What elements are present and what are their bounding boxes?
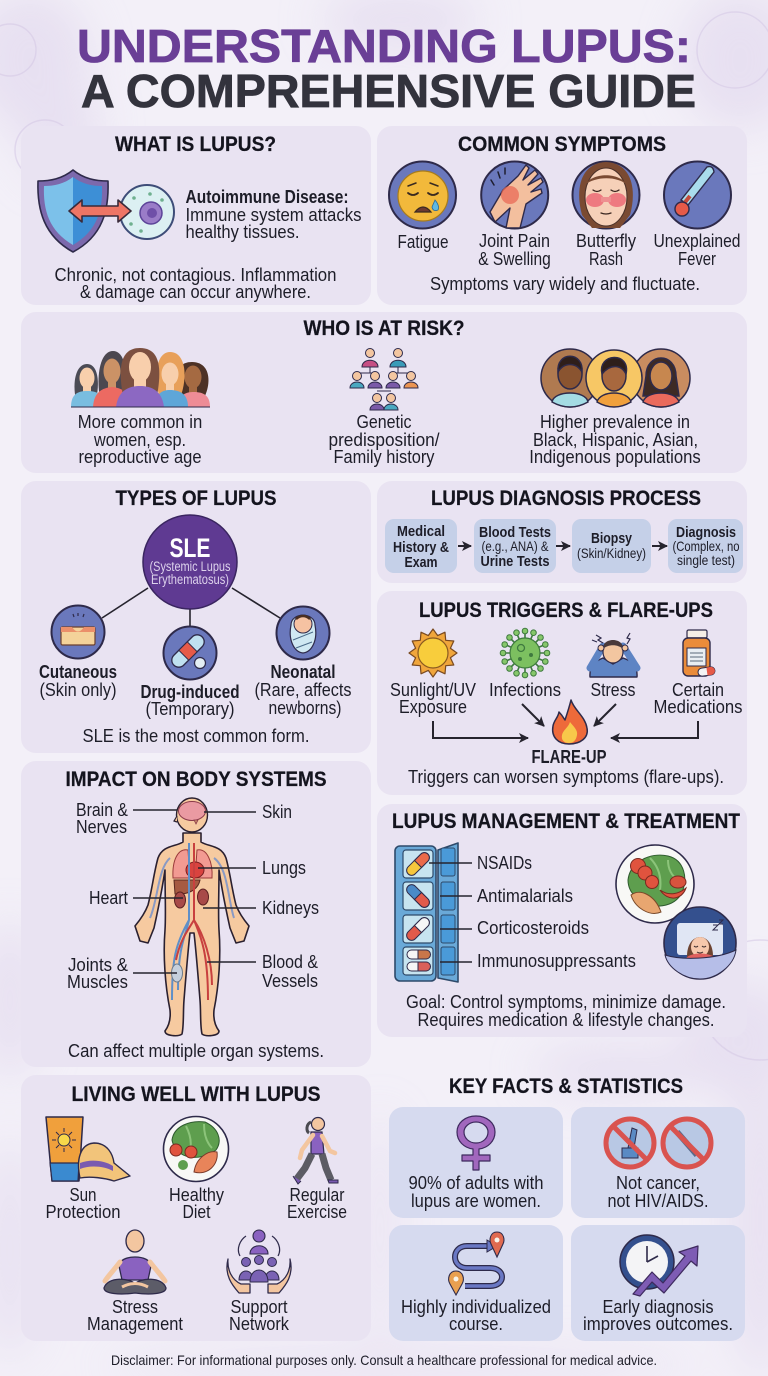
labels: risk groups: Black, Hispanic, Asian,	[533, 429, 698, 450]
heading: living well: LIVING WELL WITH LUPUS	[72, 1082, 320, 1106]
card: early diagnosis	[571, 1225, 745, 1341]
heading: diagnosis: LUPUS DIAGNOSIS PROCESS	[431, 486, 701, 510]
icon: cutaneous	[52, 606, 104, 658]
arrow	[458, 545, 471, 547]
labels: risk groups	[78, 411, 701, 467]
labels: medications: NSAIDs	[477, 852, 532, 873]
labels: symptoms	[398, 230, 740, 269]
labels: risk groups: Higher prevalence in	[540, 411, 690, 432]
diagram node: SLE: (Systemic Lupus	[150, 559, 231, 574]
label: flare-up: FLARE-UP	[532, 746, 606, 767]
card: women statistic: lupus are women.	[411, 1190, 541, 1211]
icon: crossed-out symbols	[606, 1119, 711, 1167]
labels: risk groups: Genetic	[356, 411, 412, 432]
icon: flame	[553, 700, 587, 744]
labels: types: newborns)	[268, 697, 342, 718]
text: triggers note: Triggers can worsen symptoms (flare-ups).	[408, 766, 724, 787]
labels: triggers	[390, 679, 742, 717]
step: medical history	[385, 519, 457, 573]
labels: risk groups: Family history	[334, 446, 435, 467]
labels: types: (Rare, affects	[254, 679, 352, 700]
heading: impact: IMPACT ON BODY SYSTEMS	[66, 767, 326, 791]
card: not cancer	[571, 1107, 745, 1218]
panel: living well	[21, 1075, 371, 1341]
labels: living well: Protection	[46, 1201, 120, 1222]
text: treatment goal: Goal: Control symptoms, minimize damage.	[406, 991, 726, 1012]
step: biopsy: Biopsy	[591, 530, 633, 547]
labels: medications: Immunosuppressants	[477, 950, 636, 971]
labels: living well: Sun	[70, 1184, 96, 1205]
panel: common symptoms	[377, 126, 747, 305]
labels: triggers: Exposure	[399, 696, 467, 717]
card: individualized course	[389, 1225, 563, 1341]
leader lines	[429, 863, 472, 962]
labels: living well: Exercise	[287, 1201, 347, 1222]
labels: symptoms: Fever	[678, 248, 716, 269]
step: blood tests: (e.g., ANA) &	[482, 538, 549, 554]
labels: triggers: Certain	[672, 679, 724, 700]
panel: triggers and flare-ups	[377, 591, 747, 795]
labels: body systems: Blood &	[262, 951, 319, 972]
labels: body systems: Muscles	[67, 971, 128, 992]
icon: sun protection	[46, 1117, 130, 1181]
icon: joint pain	[481, 162, 548, 228]
icon: butterfly rash	[572, 162, 640, 228]
labels: risk groups: women, esp.	[93, 429, 186, 450]
labels: living well: Support	[230, 1296, 288, 1317]
labels: living well: Stress	[112, 1296, 158, 1317]
icon: medication bottle	[683, 630, 715, 677]
panel: what is lupus	[21, 126, 371, 305]
labels: body systems	[67, 799, 319, 992]
labels: triggers: Medications	[654, 696, 742, 717]
labels: types: Drug-induced	[140, 681, 240, 702]
labels: body systems: Kidneys	[262, 897, 319, 918]
step: diagnosis: (Complex, no	[672, 538, 740, 554]
card: women statistic: 90% of adults with	[408, 1172, 544, 1193]
labels: symptoms: Butterfly	[576, 230, 637, 251]
labels: risk groups: More common in	[78, 411, 202, 432]
panel: impact on body systems	[21, 761, 371, 1067]
text: autoimmune disease	[186, 186, 362, 242]
labels: medications: Corticosteroids	[477, 917, 589, 938]
title: A COMPREHENSIVE GUIDE	[81, 65, 696, 117]
diagram node: SLE: Erythematosus)	[151, 572, 229, 587]
icon: stress management	[104, 1230, 166, 1294]
labels: types: (Skin only)	[40, 679, 116, 700]
icon: winding route	[449, 1232, 504, 1295]
icon: fatigue	[389, 162, 456, 228]
step: diagnosis: single test)	[677, 552, 735, 568]
title: UNDERSTANDING LUPUS:	[77, 20, 691, 72]
labels: living well: Network	[229, 1313, 290, 1334]
step: blood tests	[474, 519, 556, 573]
card: not cancer: not HIV/AIDS.	[608, 1190, 708, 1211]
labels: symptoms: Fatigue	[398, 231, 448, 252]
card: women statistic	[389, 1107, 563, 1218]
labels: living well: Healthy	[169, 1184, 225, 1205]
text: SLE note: SLE is the most common form.	[82, 725, 310, 746]
connector lines	[102, 588, 280, 628]
text: chronic note: Chronic, not contagious. Inflammation	[54, 264, 336, 285]
heading: key facts: KEY FACTS & STATISTICS	[449, 1074, 683, 1098]
card: individualized course: course.	[449, 1313, 503, 1334]
step: medical history: Medical	[397, 523, 445, 540]
labels: types: Neonatal	[270, 661, 336, 682]
labels: types	[39, 661, 352, 719]
card: not cancer: Not cancer,	[616, 1172, 700, 1193]
text: symptoms note: Symptoms vary widely and fluctuate.	[430, 273, 700, 294]
leader lines	[133, 810, 256, 973]
panel: management and treatment	[377, 804, 747, 1037]
diagram: human body	[135, 798, 249, 1036]
labels: body systems: Skin	[262, 801, 292, 822]
labels: body systems: Heart	[89, 887, 128, 908]
icon: sun	[409, 629, 457, 677]
heading: common symptoms: COMMON SYMPTOMS	[458, 132, 666, 156]
icon: diverse faces	[541, 349, 690, 407]
labels: types: (Temporary)	[146, 698, 234, 719]
icon: neonatal	[276, 606, 330, 660]
section: key facts and statistics	[389, 1074, 745, 1341]
arrow	[652, 545, 667, 547]
title	[77, 20, 696, 117]
icon: shield and immune cell	[38, 170, 174, 252]
heading: types of lupus: TYPES OF LUPUS	[116, 486, 276, 510]
text: impact note: Can affect multiple organ systems.	[68, 1040, 324, 1061]
icon: healthy diet	[164, 1116, 228, 1182]
card: individualized course: Highly individualized	[401, 1296, 551, 1317]
text: chronic note	[54, 264, 336, 302]
disclaimer: Disclaimer: For informational purposes only. Consult a healthcare professional for medical advice.	[111, 1352, 657, 1368]
card: early diagnosis: Early diagnosis	[602, 1296, 714, 1317]
arrows to flare-up	[433, 704, 698, 738]
labels: triggers: Infections	[489, 679, 561, 700]
heading: what is lupus: WHAT IS LUPUS?	[115, 132, 276, 156]
labels: types: Cutaneous	[39, 661, 117, 682]
labels: triggers: Sunlight/UV	[390, 679, 477, 700]
panel: types of lupus	[21, 481, 371, 753]
icon: pill organizer	[395, 843, 458, 982]
icon: family tree	[350, 348, 418, 410]
icon: stressed person	[590, 633, 637, 677]
step: biopsy	[572, 519, 651, 573]
icon: drug-induced	[164, 626, 216, 680]
labels: symptoms: & Swelling	[478, 248, 551, 269]
step: medical history: Exam	[404, 554, 438, 571]
icon: regular exercise	[293, 1118, 338, 1184]
icon: support network	[227, 1230, 291, 1293]
step: biopsy: (Skin/Kidney)	[577, 545, 646, 561]
text: autoimmune disease: Immune system attacks	[186, 204, 362, 225]
arrow	[556, 545, 570, 547]
text: autoimmune disease: healthy tissues.	[186, 221, 300, 242]
icon: sleeping person	[664, 907, 736, 979]
step: medical history: History &	[393, 539, 449, 556]
labels: medications	[477, 852, 636, 971]
labels: living well: Management	[87, 1313, 183, 1334]
icon: group of women	[71, 348, 210, 407]
icon: salad plate	[616, 845, 694, 923]
step: blood tests: Blood Tests	[479, 524, 551, 541]
step: blood tests: Urine Tests	[480, 553, 550, 570]
text: treatment goal	[406, 991, 726, 1030]
diagram node: SLE: SLE	[170, 533, 210, 563]
labels: living well: Diet	[182, 1201, 210, 1222]
labels: body systems: Brain &	[76, 799, 129, 820]
labels: medications: Antimalarials	[477, 885, 573, 906]
card: early diagnosis: improves outcomes.	[583, 1313, 733, 1334]
text: chronic note: & damage can occur anywhere.	[80, 281, 311, 302]
heading: triggers: LUPUS TRIGGERS & FLARE-UPS	[419, 598, 713, 622]
labels: risk groups: predisposition/	[328, 429, 440, 450]
diagram node: SLE	[143, 515, 237, 609]
labels: body systems: Lungs	[262, 857, 306, 878]
text: treatment goal: Requires medication & lifestyle changes.	[418, 1009, 714, 1030]
icon: clock with rising arrow	[620, 1235, 698, 1296]
labels: risk groups: reproductive age	[78, 446, 202, 467]
labels: symptoms: Joint Pain	[479, 230, 550, 251]
labels: living well: Regular	[290, 1184, 344, 1205]
icon: venus symbol	[457, 1116, 495, 1170]
panel: diagnosis process	[377, 481, 747, 583]
heading: who is at risk: WHO IS AT RISK?	[304, 316, 464, 340]
labels: symptoms: Rash	[589, 248, 623, 269]
labels: symptoms: Unexplained	[654, 230, 740, 251]
step: diagnosis: Diagnosis	[676, 524, 736, 541]
labels: body systems: Joints &	[68, 954, 129, 975]
labels: body systems: Nerves	[76, 816, 127, 837]
icon: virus	[500, 628, 550, 678]
step: diagnosis	[668, 519, 743, 573]
icon: thermometer	[664, 162, 731, 228]
labels: risk groups: Indigenous populations	[529, 446, 701, 467]
panel: who is at risk	[21, 312, 747, 473]
labels: body systems: Vessels	[262, 970, 318, 991]
labels: triggers: Stress	[590, 679, 636, 700]
labels: living well	[46, 1184, 347, 1334]
text: autoimmune disease: Autoimmune Disease:	[186, 186, 348, 207]
